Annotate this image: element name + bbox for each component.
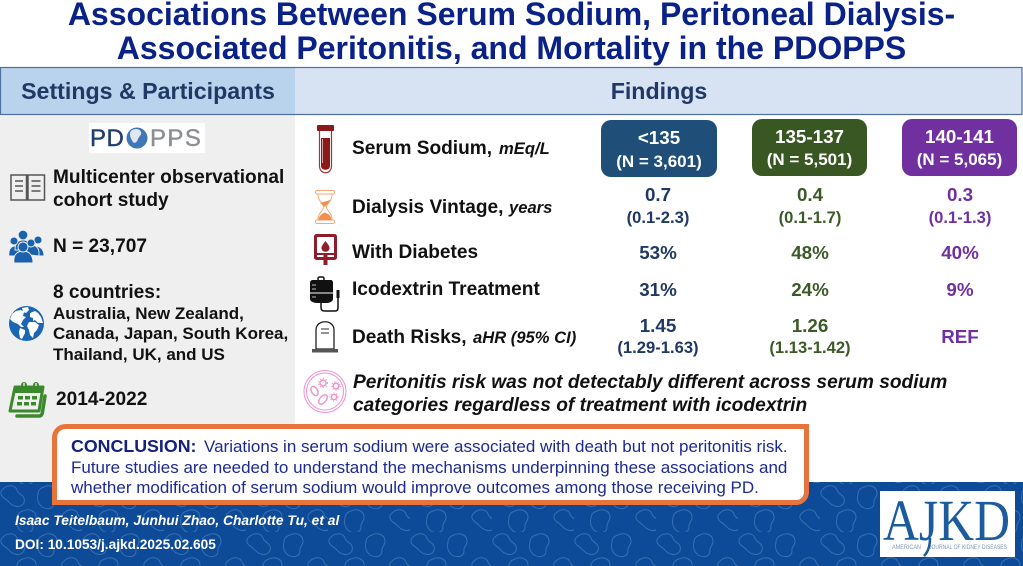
icon: people group [9, 230, 44, 263]
callout: conclusion [54, 426, 806, 502]
text: study design: cohort study [53, 190, 169, 211]
values: column 135-137: (0.1-1.7) [779, 208, 841, 227]
title: Associated Peritonitis, and Mortality in the PDOPPS [117, 30, 906, 66]
icon: petri dish [304, 370, 346, 412]
text: peritonitis finding [353, 372, 947, 416]
callout: conclusion: Future studies are needed to understand the mechanisms underpinning these associations and [71, 458, 787, 477]
pill: sodium 140-141 [902, 119, 1017, 176]
text: death risks label [352, 327, 577, 348]
text: dialysis vintage label: Dialysis Vintage, [352, 197, 503, 218]
values: column under 135: 31% [639, 279, 677, 300]
icon: tombstone [312, 322, 338, 352]
icon: dialysis bag [310, 277, 340, 311]
values: column under 135: 53% [639, 242, 677, 263]
icon: globe [9, 306, 44, 341]
values: column 135-137: 0.4 [797, 184, 824, 205]
text: death risks label: Death Risks, [352, 327, 467, 348]
pill: sodium under 135: <135 [638, 127, 680, 148]
text: DOI: DOI: 10.1053/j.ajkd.2025.02.605 [15, 537, 216, 552]
logo: AJKD: JOURNAL OF KIDNEY DISEASES [929, 545, 1007, 551]
title [68, 0, 955, 66]
text: serum sodium label: mEq/L [499, 139, 550, 158]
text: sample size: N = 23,707 [53, 236, 147, 257]
text: peritonitis finding: categories regardless of treatment with icodextrin [353, 395, 807, 416]
heading: settings and participants [0, 68, 296, 114]
text: dialysis vintage label: years [508, 198, 552, 217]
text: study period: 2014-2022 [56, 389, 147, 410]
logo: AJKD: AMERICAN [892, 545, 921, 551]
heading: findings [295, 68, 1022, 114]
panel: settings and participants background [0, 114, 295, 484]
text: study design [53, 167, 284, 211]
values: column 135-137 [769, 184, 851, 357]
values: column 135-137: 48% [791, 242, 829, 263]
pill: sodium under 135 [601, 120, 717, 177]
values: column 135-137: (1.13-1.42) [769, 338, 851, 357]
values: column under 135: (0.1-2.3) [627, 208, 689, 227]
values: column 140-141: (0.1-1.3) [929, 208, 991, 227]
pill: sodium 135-137 [752, 119, 867, 176]
logo: PDOPPS [89, 123, 205, 153]
text: diabetes label: With Diabetes [352, 242, 478, 263]
values: column under 135 [617, 184, 699, 357]
callout: conclusion: CONCLUSION: [71, 436, 196, 456]
logo: PDOPPS: PD [90, 125, 124, 152]
pill: sodium 135-137: 135-137 [775, 126, 844, 147]
pill: sodium 140-141: (N = 5,065) [917, 150, 1002, 169]
values: column under 135: 1.45 [640, 315, 676, 336]
icon: open book [11, 175, 44, 200]
text: countries: Australia, New Zealand, [53, 304, 244, 323]
text: countries: Canada, Japan, South Korea, [53, 324, 288, 343]
values: column 140-141: REF [941, 326, 979, 347]
footer band with kidney pattern [0, 482, 1023, 566]
values: column 135-137: 24% [791, 279, 829, 300]
values: column 140-141: 9% [946, 279, 974, 300]
values: column 140-141: 0.3 [947, 184, 973, 205]
text: serum sodium label: Serum Sodium, [352, 138, 492, 159]
pill: sodium 140-141: 140-141 [925, 126, 994, 147]
callout: conclusion: Variations in serum sodium were associated with death but not peritonitis risk. [204, 437, 788, 456]
values: column 140-141: 40% [941, 242, 979, 263]
icon: glucose meter [315, 236, 336, 265]
logo: PDOPPS: PPS [150, 125, 202, 152]
values: column under 135: (1.29-1.63) [617, 338, 699, 357]
text: icodextrin label: Icodextrin Treatment [352, 279, 540, 300]
heading: settings and participants: Settings & Participants [21, 78, 275, 104]
heading: findings: Findings [611, 78, 707, 104]
pill: sodium under 135: (N = 3,601) [616, 152, 702, 171]
text: countries: 8 countries: [53, 282, 161, 303]
pill: sodium 135-137: (N = 5,501) [767, 150, 852, 169]
icon: calendar [10, 382, 45, 416]
icon: hourglass [316, 190, 334, 224]
text: study design: Multicenter observational [53, 167, 284, 188]
callout: conclusion: whether modification of serum sodium would improve outcomes among those receiving PD. [70, 478, 759, 497]
values: column 135-137: 1.26 [792, 315, 828, 336]
text: authors: Isaac Teitelbaum, Junhui Zhao, Charlotte Tu, et al [15, 513, 340, 528]
icon: blood tube [317, 125, 334, 173]
text: countries: Thailand, UK, and US [53, 345, 225, 364]
text: countries [53, 282, 288, 364]
values: column 140-141 [929, 184, 991, 347]
text: death risks label: aHR (95% CI) [473, 328, 577, 347]
values: column under 135: 0.7 [645, 184, 671, 205]
text: peritonitis finding: Peritonitis risk was not detectably different across serum sodium [353, 372, 947, 393]
